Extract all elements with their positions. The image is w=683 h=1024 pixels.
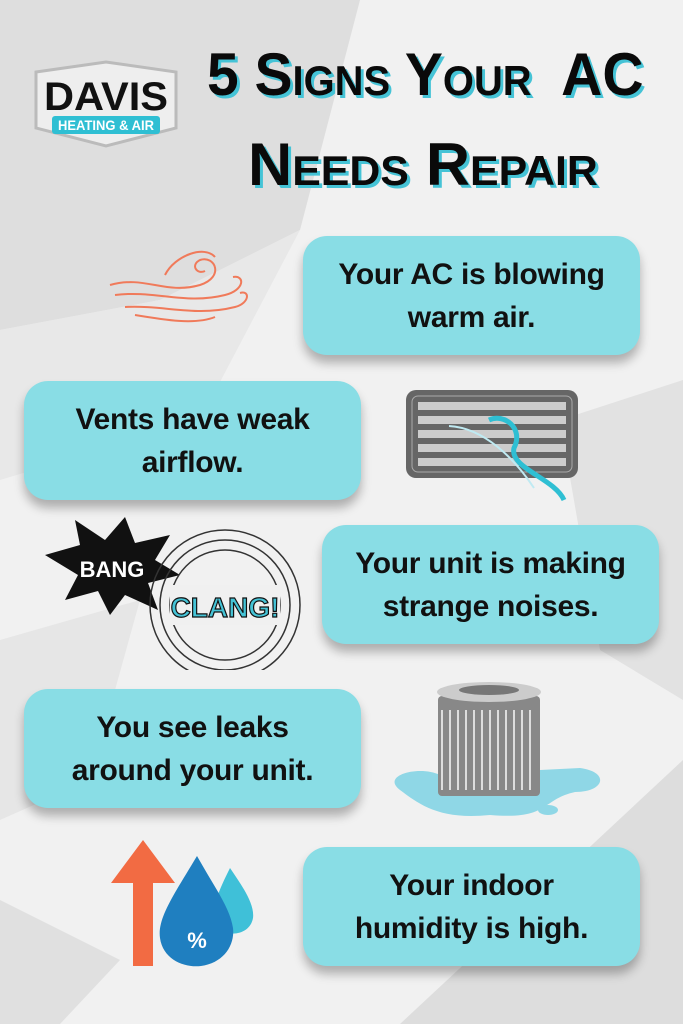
- panel: warm air: Your AC is blowing: [338, 258, 605, 290]
- panel: leaks: You see leaks: [96, 710, 289, 744]
- icon: vent: [406, 390, 578, 501]
- panel: humidity: humidity is high.: [355, 912, 588, 944]
- panel: warm air: [303, 236, 640, 355]
- panel: noises: Your unit is making: [355, 546, 626, 580]
- logo: [34, 60, 178, 148]
- logo: HEATING & AIR: [58, 117, 154, 133]
- panel: noises: [322, 525, 659, 644]
- icon: humidity: [111, 840, 254, 966]
- icon: bang clang: BANG: [80, 557, 144, 582]
- panel: noises: strange noises.: [383, 590, 598, 622]
- icon: leaking unit: [394, 682, 600, 816]
- title: 5 Signs Your AC: [207, 41, 643, 108]
- panel: weak airflow: Vents have weak: [76, 402, 309, 436]
- title: [207, 41, 645, 198]
- icon: bang clang: [45, 517, 301, 670]
- panel: warm air: warm air.: [408, 300, 535, 334]
- panel: humidity: Your indoor: [389, 868, 554, 902]
- title: Needs Repair: [248, 131, 598, 198]
- panel: weak airflow: [24, 381, 361, 500]
- logo: DAVIS: [44, 75, 168, 119]
- icon: wind: [110, 250, 248, 322]
- panel: leaks: [24, 689, 361, 808]
- icon: humidity: %: [187, 928, 207, 953]
- icon: bang clang: CLANG!: [171, 592, 279, 623]
- panel: humidity: [303, 847, 640, 966]
- panel: leaks: around your unit.: [72, 754, 313, 786]
- panel: weak airflow: airflow.: [142, 446, 243, 478]
